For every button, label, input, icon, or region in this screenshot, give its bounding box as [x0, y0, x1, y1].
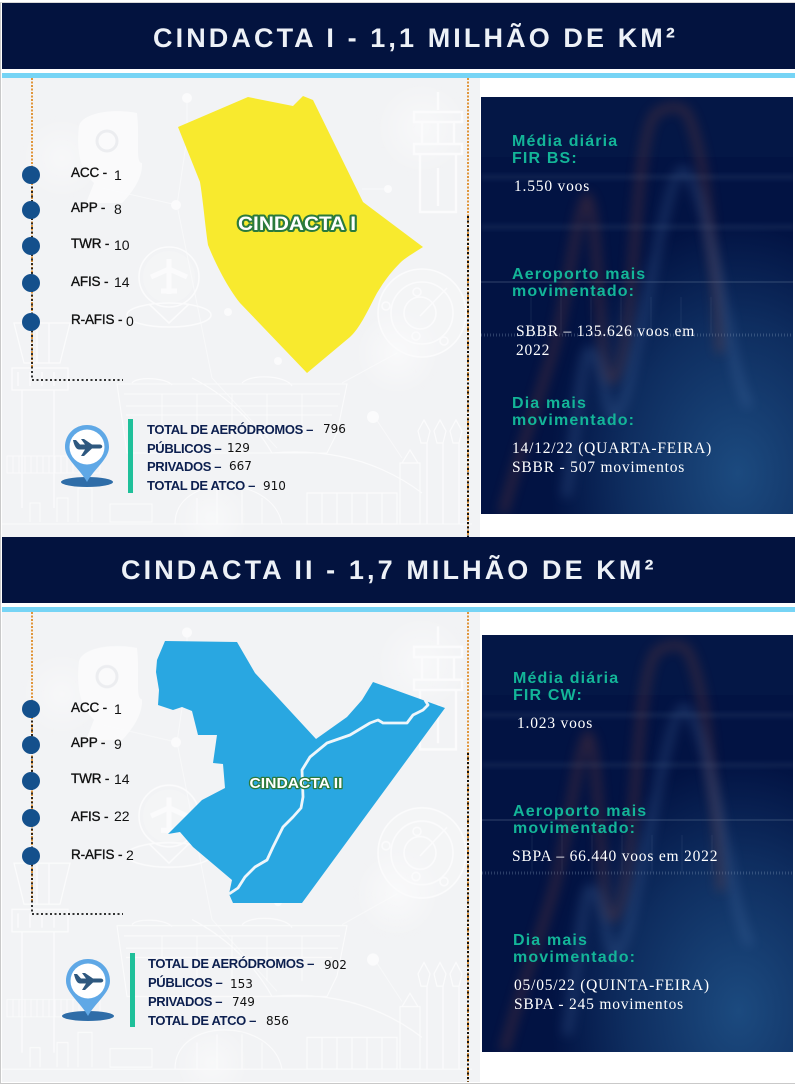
panel: CINDACTA II left [2, 612, 480, 1082]
list: CINDACTA II units: 1 [114, 701, 122, 717]
list: CINDACTA II units: 9 [114, 736, 122, 752]
list: CINDACTA I units: TWR - [71, 236, 109, 251]
list: CINDACTA I units [22, 165, 134, 331]
list: CINDACTA I units: 8 [114, 201, 122, 217]
panel: CINDACTA I statistics: Aeroporto mais [512, 266, 646, 283]
panel: CINDACTA II statistics: movimentado: [513, 820, 636, 837]
list: CINDACTA II units: TWR - [71, 771, 109, 786]
list: CINDACTA I units: 0 [126, 313, 134, 329]
header: CINDACTA I: CINDACTA I - 1,1 MILHÃO DE KM² [153, 23, 678, 53]
icon: airplane location pin [61, 425, 113, 487]
list: CINDACTA II units: APP - [71, 735, 105, 750]
map: CINDACTA I: CINDACTA I [238, 214, 356, 235]
panel: CINDACTA I statistics: 1.550 voos [514, 178, 590, 195]
totals: CINDACTA II: TOTAL DE ATCO – [148, 1013, 256, 1028]
totals: CINDACTA I: PRIVADOS – [147, 459, 221, 474]
header: CINDACTA II: CINDACTA II - 1,7 MILHÃO DE KM² [121, 555, 657, 585]
panel: CINDACTA II statistics: Média diária [513, 670, 619, 687]
totals: CINDACTA II: 856 [266, 1014, 289, 1028]
panel: CINDACTA I statistics: SBBR - 507 movimentos [512, 459, 685, 476]
map: CINDACTA II [156, 641, 445, 903]
dotted connector: left timeline [31, 78, 469, 537]
panel: CINDACTA II statistics: Dia mais [513, 932, 588, 949]
totals: CINDACTA II: TOTAL DE AERÓDROMOS – [148, 956, 314, 971]
totals: CINDACTA II: PÚBLICOS – [148, 975, 222, 990]
list: CINDACTA II units: AFIS - [71, 809, 108, 824]
list: CINDACTA II units: R-AFIS - [71, 847, 122, 862]
light blue rule [2, 607, 795, 612]
dotted connector: left timeline [31, 612, 469, 1082]
list: CINDACTA I units: 1 [114, 167, 122, 183]
totals: CINDACTA II [148, 956, 347, 1028]
list: CINDACTA II units [22, 700, 134, 865]
header: CINDACTA I [2, 3, 795, 69]
totals: CINDACTA I: 796 [323, 422, 346, 436]
panel: CINDACTA II statistics: SBPA - 245 movimentos [514, 996, 684, 1013]
panel: CINDACTA I statistics: FIR BS: [512, 150, 578, 167]
panel: CINDACTA I statistics: movimentado: [512, 412, 635, 429]
icon: airplane location pin [62, 959, 114, 1021]
totals: CINDACTA I: 667 [229, 459, 252, 473]
list: CINDACTA I units: APP - [71, 200, 105, 215]
panel: CINDACTA I statistics: movimentado: [512, 283, 635, 300]
totals: CINDACTA II: PRIVADOS – [148, 994, 222, 1009]
list: CINDACTA I units: AFIS - [71, 274, 108, 289]
accent bar [130, 953, 135, 1027]
list: CINDACTA II units: 22 [114, 808, 130, 824]
map: CINDACTA II: CINDACTA II [250, 775, 342, 792]
panel: CINDACTA II statistics: movimentado: [513, 949, 636, 966]
list: CINDACTA I units: 14 [114, 274, 130, 290]
totals: CINDACTA I: TOTAL DE AERÓDROMOS – [147, 422, 313, 437]
panel: CINDACTA I statistics: SBBR – 135.626 voos em [516, 323, 695, 340]
list: CINDACTA I units: ACC - [71, 165, 107, 180]
list: CINDACTA II units: ACC - [71, 700, 107, 715]
accent bar [128, 419, 133, 493]
panel: CINDACTA II statistics [482, 635, 793, 1052]
totals: CINDACTA I [147, 422, 346, 493]
panel: CINDACTA II statistics: 05/05/22 (QUINTA-FEIRA) [514, 977, 710, 994]
panel: CINDACTA II statistics: Aeroporto mais [513, 803, 647, 820]
list: CINDACTA I units: R-AFIS - [71, 312, 122, 327]
panel: CINDACTA I statistics: 14/12/22 (QUARTA-FEIRA) [512, 440, 712, 457]
totals: CINDACTA I: 910 [263, 479, 286, 493]
totals: CINDACTA II: 902 [324, 958, 347, 972]
panel: CINDACTA I left [2, 78, 480, 537]
list: CINDACTA II units: 14 [114, 771, 130, 787]
panel: CINDACTA I statistics [481, 97, 793, 514]
totals: CINDACTA II: 153 [230, 977, 253, 991]
header: CINDACTA II [2, 537, 795, 603]
list: CINDACTA II units: 2 [126, 847, 134, 863]
panel: CINDACTA I statistics: 2022 [516, 342, 550, 359]
totals: CINDACTA I: TOTAL DE ATCO – [147, 478, 255, 493]
panel: CINDACTA II statistics: FIR CW: [513, 687, 583, 704]
totals: CINDACTA I: 129 [227, 441, 250, 455]
light blue rule [2, 73, 795, 78]
panel: CINDACTA I statistics: Dia mais [512, 395, 587, 412]
totals: CINDACTA II: 749 [232, 995, 255, 1009]
panel: CINDACTA II statistics: SBPA – 66.440 voos em 2022 [512, 848, 718, 865]
panel: CINDACTA I statistics: Média diária [512, 133, 618, 150]
totals: CINDACTA I: PÚBLICOS – [147, 441, 221, 456]
map: CINDACTA I [178, 96, 423, 373]
panel: CINDACTA II statistics: 1.023 voos [517, 715, 593, 732]
list: CINDACTA I units: 10 [114, 237, 130, 253]
